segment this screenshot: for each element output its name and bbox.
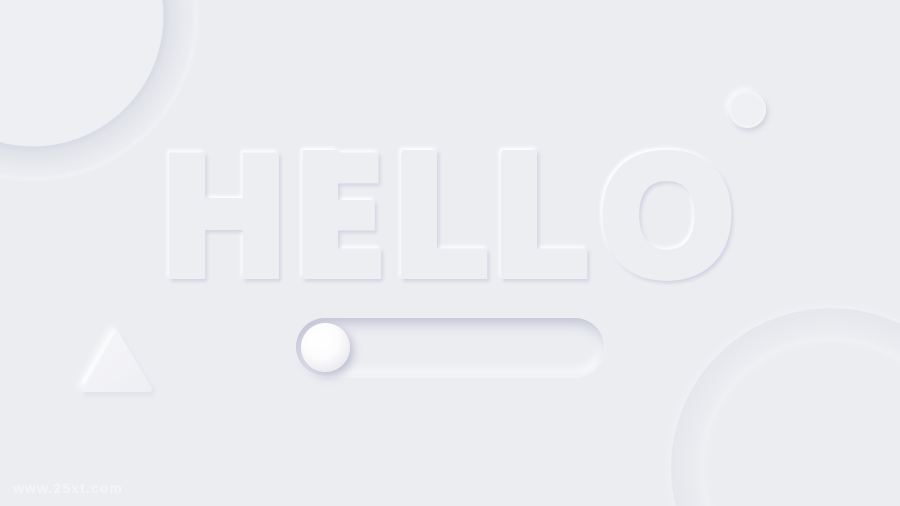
icon: triangle [81, 329, 152, 394]
panel: bottom-right circle [650, 290, 900, 506]
panel: top-left circle [0, 0, 205, 190]
watermark: www.25xt.com [13, 480, 123, 496]
icon: small circle [729, 91, 766, 128]
panel: slider track [296, 318, 604, 376]
slider knob [301, 323, 350, 372]
title: HELLO embossed lettering [164, 130, 734, 300]
